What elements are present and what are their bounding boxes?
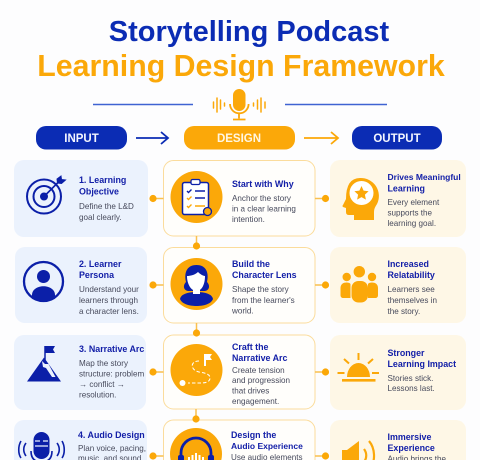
panel: drives meaningful learning: Learning	[388, 184, 425, 194]
icon: sun on horizon	[338, 353, 379, 380]
panel: start with why	[164, 160, 315, 236]
panel: build the character lens: Shape the story	[232, 285, 290, 294]
panel: start with why: Start with Why	[232, 179, 294, 189]
panel: immersive experience	[330, 420, 466, 460]
icon: character	[170, 258, 222, 310]
panel: narrative arc: resolution.	[79, 390, 116, 400]
icon: studio microphone	[19, 432, 64, 460]
panel: learning objective: Objective	[79, 186, 119, 196]
icon: microphone with sound waves	[214, 89, 265, 120]
panel: stronger learning impact: Stronger	[388, 348, 425, 358]
panel: increased relatability: Increased	[388, 259, 429, 269]
title: Learning Design Framework	[37, 50, 445, 83]
panel: build the character lens: Character Lens	[232, 270, 297, 280]
panel: craft the narrative arc: Create tension	[232, 366, 285, 375]
panel: narrative arc: → conflict →	[79, 380, 125, 389]
panel: audio design: Plan voice, pacing,	[78, 444, 146, 453]
panel: learner persona: Understand your	[79, 285, 139, 294]
icon: group of people	[340, 266, 378, 302]
icon: persona	[24, 262, 63, 301]
panel: learner persona: a character lens.	[79, 307, 139, 316]
panel: start with why: intention.	[232, 215, 265, 224]
panel: learning objective: goal clearly.	[79, 213, 122, 222]
pill: input	[36, 126, 127, 150]
panel: audio design: 4. Audio Design	[78, 430, 145, 440]
title	[37, 16, 445, 83]
icon: story path	[170, 344, 222, 396]
panel: build the character lens: Build the	[232, 259, 270, 269]
panel: immersive experience: Experience	[388, 443, 435, 453]
icon: checklist	[170, 171, 222, 223]
icon: target	[27, 176, 66, 214]
panel: increased relatability: the story.	[388, 307, 420, 316]
panel: drives meaningful learning: Drives Meaningful	[388, 172, 461, 182]
panel: narrative arc	[14, 335, 146, 410]
pill: design: DESIGN	[217, 133, 261, 145]
panel: craft the narrative arc: and progression	[232, 376, 290, 385]
panel: craft the narrative arc	[164, 335, 315, 409]
panel: stronger learning impact: Learning Impact	[388, 359, 456, 369]
panel: narrative arc: structure: problem	[79, 370, 144, 378]
panel: build the character lens: world.	[231, 306, 254, 316]
panel: build the character lens	[164, 248, 315, 323]
arrow: design to output	[304, 132, 338, 144]
panel: start with why: Anchor the story	[232, 194, 292, 203]
icon: head with star	[342, 178, 379, 220]
panel: immersive experience: Immersive	[388, 432, 431, 442]
panel: increased relatability: themselves in	[388, 296, 437, 305]
icon: headphones	[170, 428, 222, 460]
panel: stronger learning impact: Stories stick.	[388, 374, 433, 383]
icon: mountain with flag	[27, 346, 61, 382]
panel: design the audio experience	[164, 420, 315, 460]
connectors	[149, 195, 329, 460]
panel: craft the narrative arc: engagement.	[232, 397, 279, 406]
icon: speaker	[342, 441, 374, 460]
panel: drives meaningful learning: learning goal.	[388, 219, 436, 228]
panel: craft the narrative arc: Craft the	[232, 342, 269, 352]
arrow: input to design	[136, 132, 168, 144]
panel: learner persona: learners through	[79, 296, 138, 305]
panel: increased relatability: Relatability	[388, 270, 435, 280]
panel: learning objective: Define the L&D	[79, 202, 134, 211]
panel: start with why: in a clear learning	[232, 204, 296, 214]
panel: drives meaningful learning: supports the	[388, 208, 433, 218]
pill: output	[352, 126, 442, 150]
panel: narrative arc: 3. Narrative Arc	[79, 344, 144, 354]
panel: narrative arc: Map the story	[79, 359, 129, 368]
panel: increased relatability: Learners see	[388, 285, 435, 294]
panel: learner persona: 2. Learner	[79, 259, 122, 269]
panel: learner persona: Persona	[79, 270, 114, 280]
pill: design	[184, 126, 295, 150]
panel: stronger learning impact: Lessons last.	[388, 384, 435, 393]
panel: craft the narrative arc: Narrative Arc	[232, 353, 287, 363]
title: Storytelling Podcast	[109, 16, 390, 48]
panel: audio design	[14, 420, 147, 460]
panel: learning objective	[14, 160, 148, 237]
panel: build the character lens: from the learner's	[232, 296, 295, 305]
panel: increased relatability	[330, 247, 466, 323]
panel: design the audio experience: Design the	[231, 430, 276, 440]
panel: stronger learning impact	[330, 335, 466, 410]
panel: craft the narrative arc: that drives	[232, 386, 269, 396]
pill: output: OUTPUT	[373, 133, 421, 145]
pill: input: INPUT	[64, 133, 99, 145]
panel: design the audio experience: Audio Experience	[231, 441, 303, 451]
panel: drives meaningful learning: Every element	[388, 198, 440, 207]
panel: drives meaningful learning	[330, 160, 466, 237]
panel: learner persona	[15, 247, 147, 323]
panel: learning objective: 1. Learning	[79, 175, 126, 185]
